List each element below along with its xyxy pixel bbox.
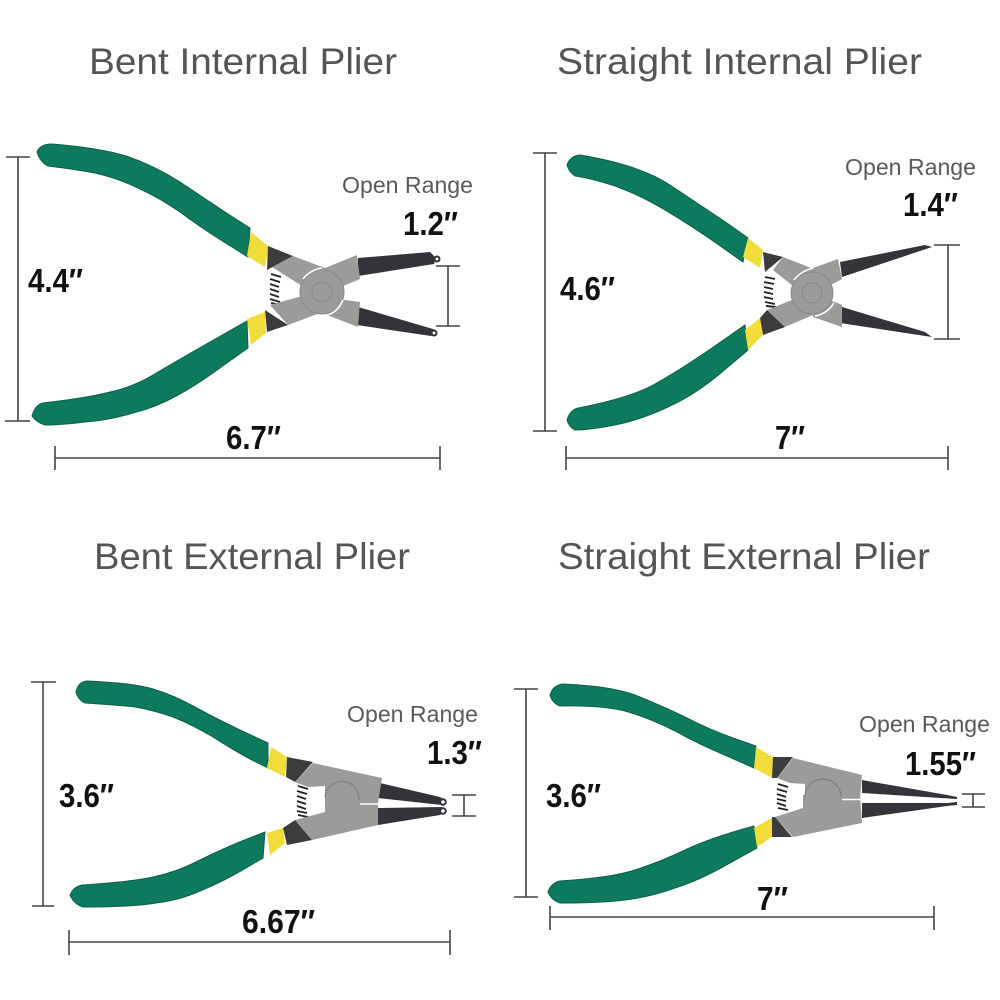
length dimension line	[69, 930, 450, 955]
open range label: Open Range	[342, 172, 473, 198]
open range label: Open Range	[845, 154, 976, 180]
panel: bent external plier	[31, 536, 482, 955]
length value: 7″	[775, 419, 805, 456]
height value: 3.6″	[546, 777, 601, 814]
length dimension line	[550, 906, 934, 930]
open range dimension line	[934, 245, 960, 339]
height dimension line	[31, 682, 56, 906]
open range value: 1.55″	[905, 745, 976, 782]
icon: straight internal plier tool	[567, 155, 932, 430]
icon: bent internal plier tool	[32, 144, 440, 425]
height dimension line	[533, 153, 557, 431]
length dimension line	[55, 446, 440, 470]
height value: 4.6″	[560, 270, 615, 307]
length dimension line	[566, 446, 948, 470]
open range value: 1.4″	[903, 186, 958, 223]
open range value: 1.2″	[403, 205, 458, 242]
open range dimension line	[452, 795, 476, 816]
icon: straight external plier tool	[548, 684, 957, 903]
panel: bent internal plier	[5, 41, 473, 470]
length value: 7″	[757, 880, 788, 917]
length value: 6.7″	[226, 419, 281, 456]
panel: straight external plier	[514, 536, 990, 930]
height value: 3.6″	[59, 777, 114, 814]
panel: straight internal plier	[533, 41, 976, 470]
icon: bent external plier tool	[70, 681, 446, 907]
heading: straight internal plier: Straight Internal Plier	[557, 41, 922, 82]
open range label: Open Range	[347, 701, 478, 727]
height dimension line	[514, 689, 538, 897]
open range label: Open Range	[859, 711, 990, 737]
heading: straight external plier: Straight External Plier	[558, 536, 930, 577]
height dimension line	[5, 157, 30, 421]
heading: bent external plier: Bent External Plier	[94, 536, 410, 577]
open range dimension line	[962, 794, 985, 807]
open range dimension line	[436, 266, 460, 326]
length value: 6.67″	[242, 903, 315, 940]
heading: bent internal plier: Bent Internal Plier	[89, 41, 397, 82]
height value: 4.4″	[28, 262, 83, 299]
open range value: 1.3″	[427, 734, 482, 771]
